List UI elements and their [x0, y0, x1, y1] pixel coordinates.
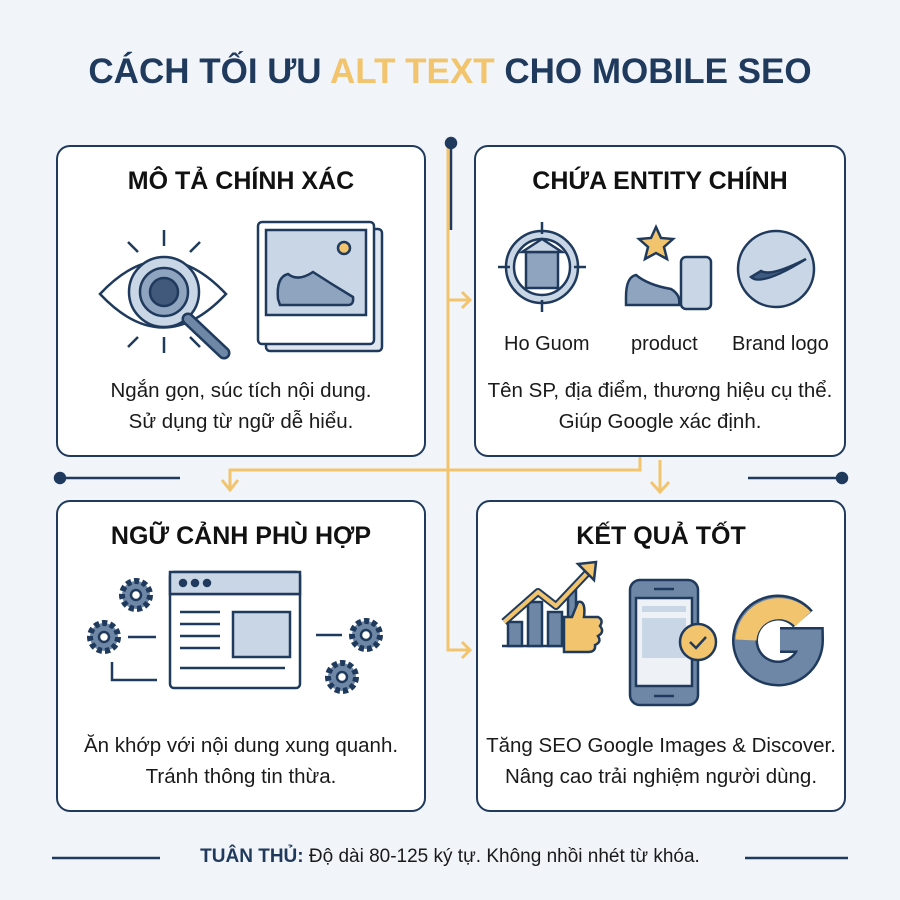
panel: kết quả tốt: [476, 500, 846, 812]
panel: chứa entity chính: product: [631, 333, 698, 355]
panel: ngữ cảnh phù hợp: [56, 500, 426, 812]
text: [84, 734, 398, 788]
labels: [504, 333, 829, 355]
panel: chứa entity chính: [474, 145, 846, 457]
panel: chứa entity chính: Ho Guom: [504, 333, 590, 355]
heading: KẾT QUẢ TỐT: [576, 522, 746, 550]
panel: mô tả chính xác: [56, 145, 426, 457]
icon: gears and browser: [87, 570, 383, 694]
text: Ăn khớp với nội dung xung quanh.: [84, 734, 398, 757]
icons: entity examples: [498, 222, 816, 312]
text: Tăng SEO Google Images & Discover.: [486, 734, 836, 757]
text: Nâng cao trải nghiệm người dùng.: [505, 765, 817, 788]
text: Sử dụng từ ngữ dễ hiểu.: [129, 410, 353, 433]
heading: CHỨA ENTITY CHÍNH: [532, 167, 788, 195]
icon: eye and magnifier, photo: [98, 220, 384, 360]
heading: MÔ TẢ CHÍNH XÁC: [128, 167, 354, 195]
text: Tên SP, địa điểm, thương hiệu cụ thể.: [488, 379, 832, 402]
text: Giúp Google xác định.: [559, 410, 761, 433]
text: [110, 379, 372, 433]
text: [488, 379, 832, 433]
text: [486, 734, 836, 788]
text: Ngắn gọn, súc tích nội dung.: [110, 379, 372, 402]
icons: chart, phone, google: [501, 560, 824, 706]
title: CÁCH TỐI ƯU ALT TEXT CHO MOBILE SEO: [88, 52, 812, 91]
text: Tránh thông tin thừa.: [146, 765, 336, 788]
footer note: TUÂN THỦ: Độ dài 80-125 ký tự. Không nhồi nhét từ khóa.: [200, 846, 700, 867]
heading: NGỮ CẢNH PHÙ HỢP: [111, 522, 371, 550]
panel: chứa entity chính: Brand logo: [732, 333, 829, 355]
